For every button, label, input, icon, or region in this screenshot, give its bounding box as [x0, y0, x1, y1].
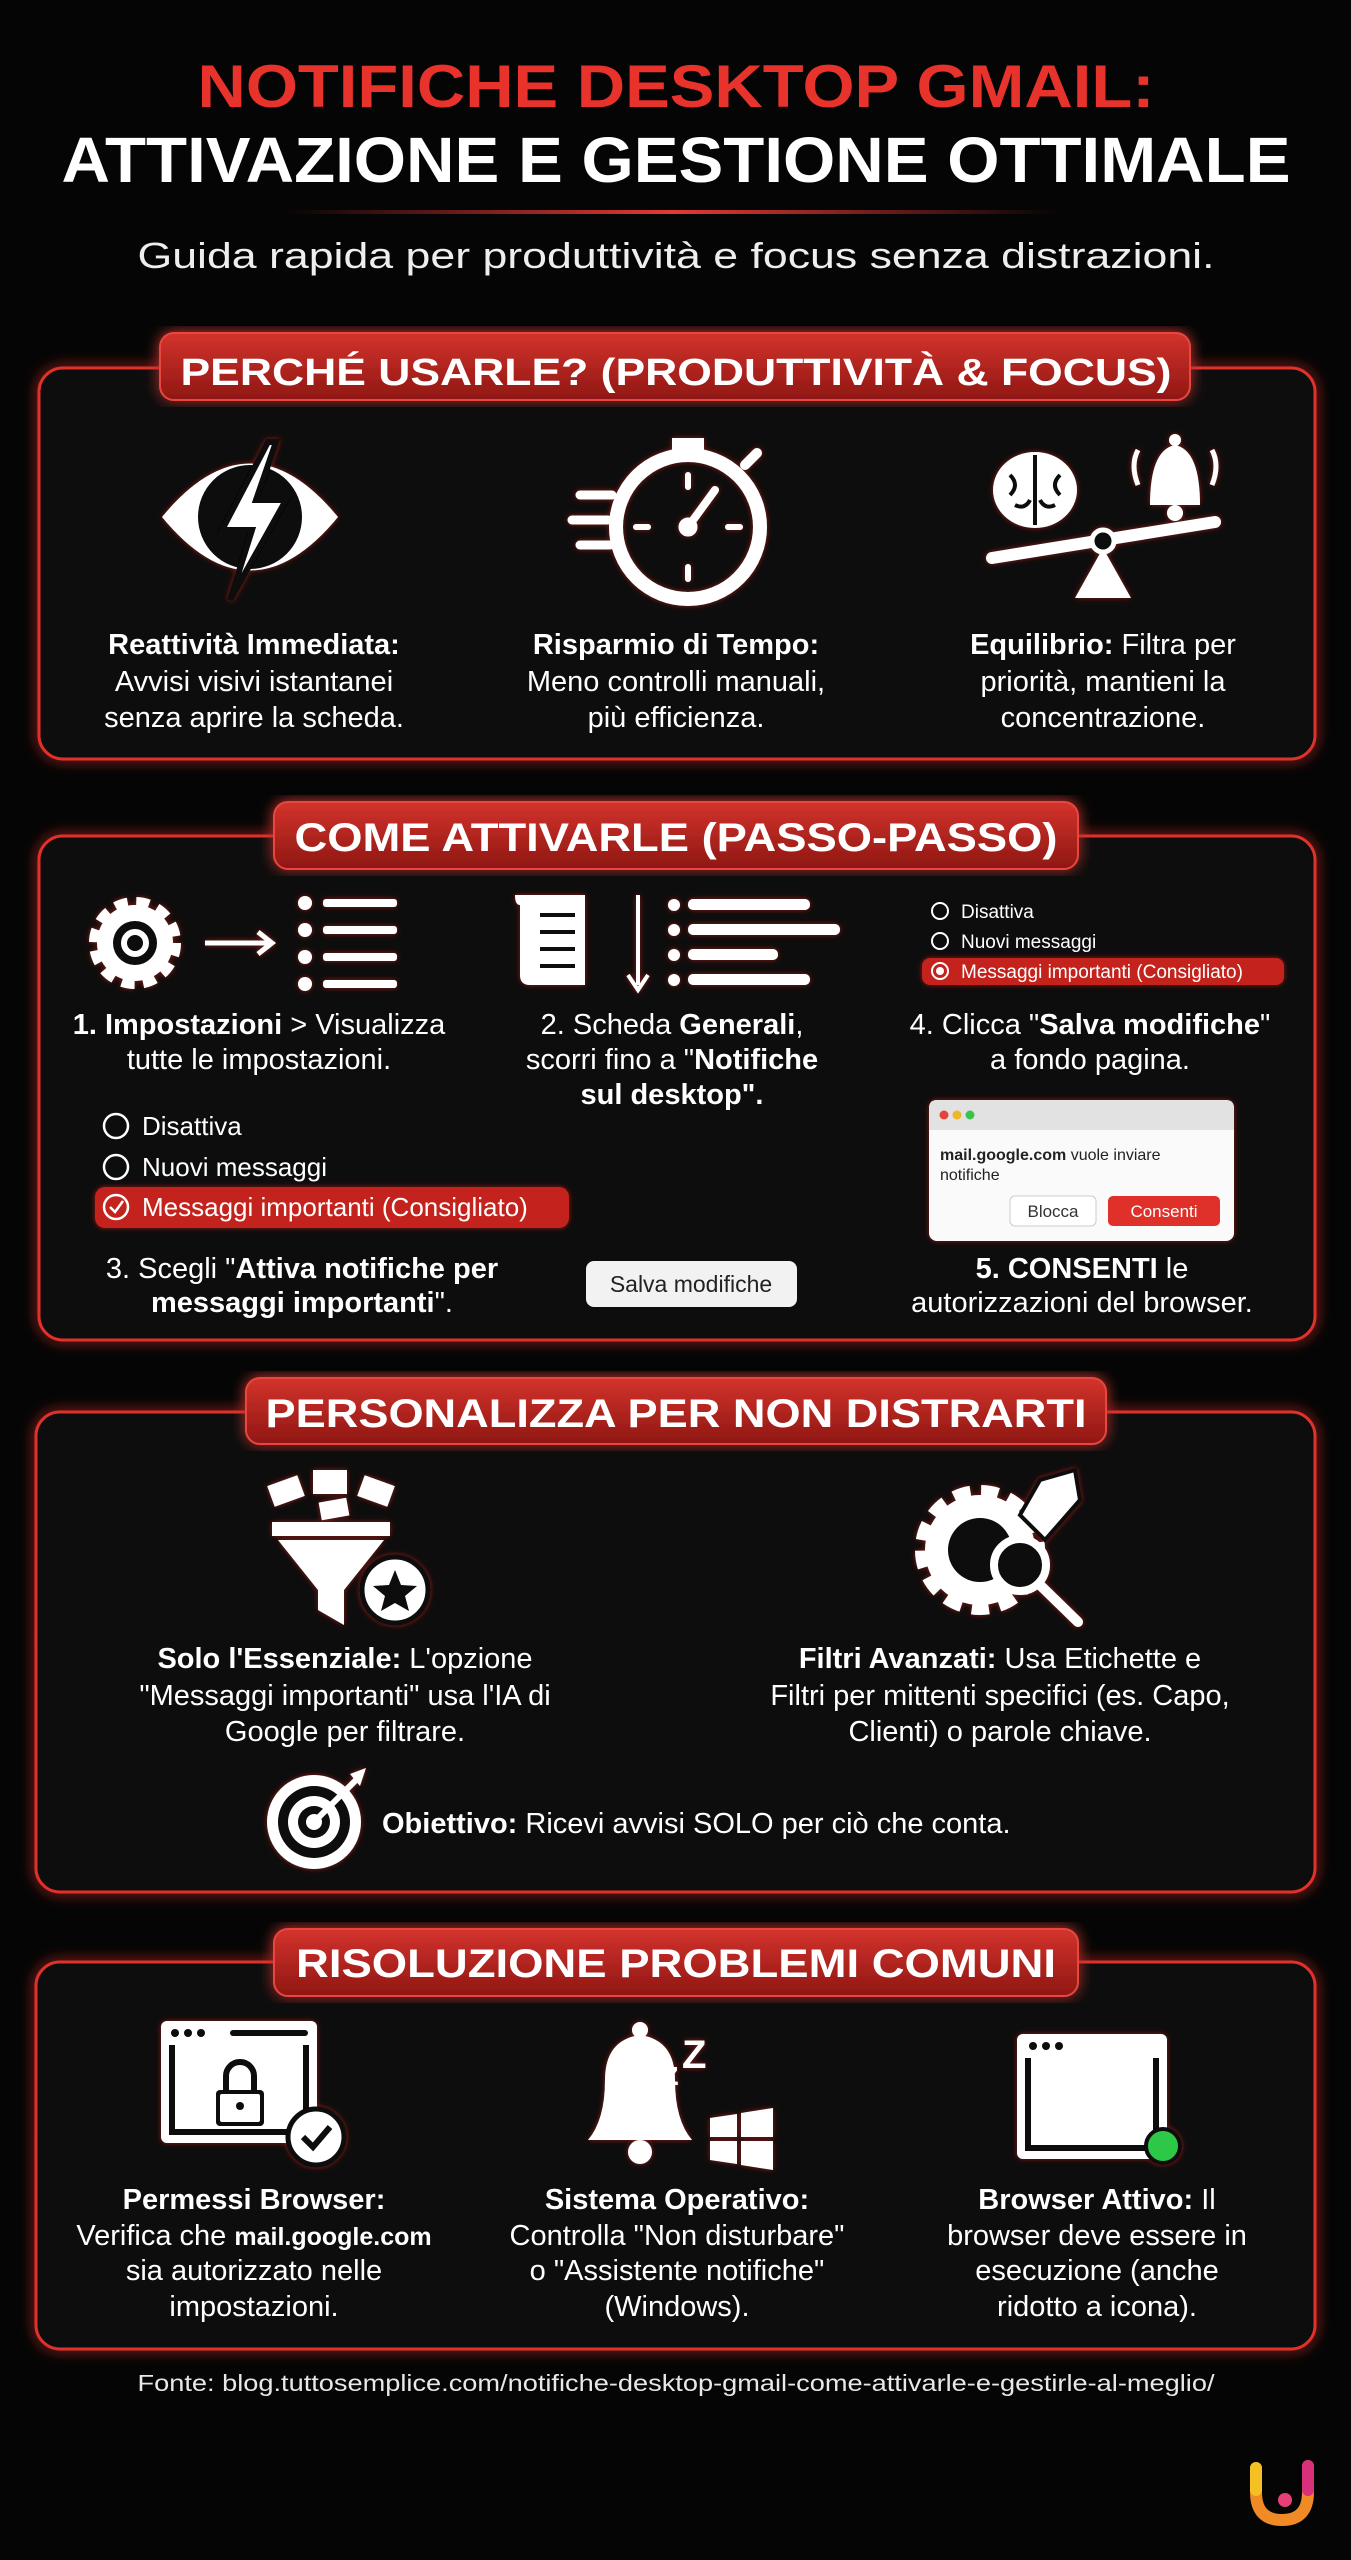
icon: funnel with envelopes and star — [267, 1470, 428, 1625]
text: equilibrio: concentrazione. — [1001, 702, 1205, 734]
subtitle: Guida rapida per produttività e focus senza distrazioni. — [138, 235, 1214, 276]
panel: personalizza — [36, 1378, 1315, 1892]
text: permessi browser — [76, 2184, 432, 2323]
text: browser attivo: browser deve essere in — [947, 2220, 1247, 2252]
text: sistema operativo: Sistema Operativo: — [545, 2184, 809, 2216]
step 3 radio options: Nuovi messaggi — [142, 1152, 327, 1182]
panel: risoluzione problemi — [36, 1929, 1315, 2349]
button: salva modifiche — [586, 1261, 797, 1307]
browser permission dialog: notifiche — [940, 1167, 1000, 1184]
text: reattività — [104, 629, 404, 734]
browser permission dialog: Blocca — [1027, 1202, 1079, 1221]
text: obiettivo: Obiettivo: Ricevi avvisi SOLO per ciò che conta. — [382, 1808, 1011, 1840]
step 4 radio options — [922, 902, 1284, 985]
logo — [1256, 2466, 1308, 2520]
text: filtri avanzati — [770, 1643, 1230, 1748]
text: solo l'essenziale: Google per filtrare. — [225, 1716, 465, 1748]
text: step 1 — [73, 1009, 446, 1076]
text: step 5: autorizzazioni del browser. — [911, 1287, 1253, 1319]
footer source: Fonte: blog.tuttosemplice.com/notifiche-desktop-gmail-come-attivarle-e-gestirle-al-meglio/ — [138, 2370, 1215, 2396]
icon: bell zzz windows: z — [662, 2055, 679, 2093]
header: risoluzione — [274, 1929, 1078, 1996]
text: step 5 — [911, 1253, 1253, 1319]
icon: bell zzz windows: Z — [682, 2033, 706, 2077]
text: solo l'essenziale — [139, 1643, 551, 1748]
text: step 4 — [910, 1009, 1270, 1076]
text: reattività: Reattività Immediata: — [108, 629, 400, 661]
icon: browser lock check — [161, 2021, 344, 2165]
step 4 radio options: Messaggi importanti (Consigliato) — [961, 962, 1243, 983]
text: risparmio: Meno controlli manuali, — [527, 666, 825, 698]
header: perché usarle — [160, 333, 1190, 400]
icon: eye with lightning — [162, 442, 338, 600]
text: solo l'essenziale: "Messaggi importanti" usa l'IA di — [139, 1680, 551, 1712]
button: salva modifiche: Salva modifiche — [610, 1271, 772, 1297]
text: sistema operativo: (Windows). — [604, 2291, 750, 2323]
header: personalizza — [246, 1378, 1106, 1444]
header: risoluzione: RISOLUZIONE PROBLEMI COMUNI — [296, 1942, 1056, 1986]
title — [62, 53, 1290, 196]
step 3 radio options: Disattiva — [142, 1111, 242, 1141]
text: step 1: tutte le impostazioni. — [127, 1044, 391, 1076]
text: sistema operativo: Controlla "Non disturbare" — [510, 2220, 844, 2252]
text: sistema operativo — [510, 2184, 844, 2323]
text: solo l'essenziale: Solo l'Essenziale: L'opzione — [157, 1643, 533, 1675]
text: browser attivo — [947, 2184, 1247, 2323]
text: step 2: scorri fino a "Notifiche — [526, 1044, 818, 1076]
header: perché usarle: PERCHÉ USARLE? (PRODUTTIVITÀ & FOCUS) — [180, 350, 1172, 394]
step 3 radio options: Messaggi importanti (Consigliato) — [142, 1192, 528, 1222]
browser permission dialog — [929, 1100, 1234, 1241]
text: reattività: Avvisi visivi istantanei — [115, 666, 393, 698]
icon: gear, tag and magnifier — [925, 1470, 1080, 1622]
header: come attivarle — [274, 802, 1078, 869]
browser permission dialog: mail.google.com vuole inviare — [940, 1147, 1161, 1164]
text: step 2: sul desktop". — [581, 1079, 763, 1111]
text: filtri avanzati: Clienti) o parole chiave. — [848, 1716, 1152, 1748]
text: step 4: 4. Clicca "Salva modifiche" — [910, 1009, 1270, 1041]
text: browser attivo: ridotto a icona). — [997, 2291, 1197, 2323]
icon: scroll down list — [515, 895, 840, 990]
text: browser attivo: Browser Attivo: Il — [978, 2184, 1216, 2216]
header: personalizza: PERSONALIZZA PER NON DISTRARTI — [266, 1392, 1086, 1436]
panel: perché usarle — [39, 333, 1315, 759]
text: step 2: 2. Scheda Generali, — [541, 1009, 803, 1041]
text: permessi browser: Verifica che mail.google.com — [76, 2220, 432, 2252]
text: risparmio: più efficienza. — [588, 702, 764, 734]
icon: brain, bell and balance — [992, 434, 1216, 598]
step 3 radio options — [95, 1111, 569, 1228]
text: permessi browser: impostazioni. — [169, 2291, 339, 2323]
header: come attivarle: COME ATTIVARLE (PASSO-PASSO) — [294, 816, 1058, 860]
text: equilibrio — [970, 629, 1236, 734]
text: step 2 — [526, 1009, 818, 1111]
text: browser attivo: esecuzione (anche — [975, 2255, 1219, 2287]
text: equilibrio: priorità, mantieni la — [980, 666, 1226, 698]
text: step 5: 5. CONSENTI le — [976, 1253, 1188, 1285]
text: step 3: messaggi importanti". — [151, 1287, 453, 1319]
text: filtri avanzati: Filtri Avanzati: Usa Etichette e — [799, 1643, 1201, 1675]
text: permessi browser: sia autorizzato nelle — [126, 2255, 382, 2287]
text: reattività: senza aprire la scheda. — [104, 702, 404, 734]
text: permessi browser: Permessi Browser: — [123, 2184, 385, 2216]
text: step 3: 3. Scegli "Attiva notifiche per — [106, 1253, 498, 1285]
step 4 radio options: Disattiva — [961, 902, 1034, 923]
text: risparmio — [527, 629, 825, 734]
title: NOTIFICHE DESKTOP GMAIL: — [198, 53, 1154, 120]
icon: browser with green dot — [1017, 2034, 1180, 2163]
icon: target — [267, 1768, 366, 1869]
panel: come attivarle — [39, 802, 1315, 1340]
text: risparmio: Risparmio di Tempo: — [533, 629, 819, 661]
text: sistema operativo: o "Assistente notifiche" — [530, 2255, 824, 2287]
text: equilibrio: Equilibrio: Filtra per — [970, 629, 1236, 661]
browser permission dialog: Consenti — [1130, 1202, 1198, 1221]
step 4 radio options: Nuovi messaggi — [961, 932, 1096, 953]
title: ATTIVAZIONE E GESTIONE OTTIMALE — [62, 124, 1290, 196]
icon: stopwatch — [572, 440, 760, 599]
text: step 3 — [106, 1253, 498, 1319]
text: filtri avanzati: Filtri per mittenti specifici (es. Capo, — [770, 1680, 1230, 1712]
text: step 4: a fondo pagina. — [990, 1044, 1190, 1076]
text: step 1: 1. Impostazioni > Visualizza — [73, 1009, 446, 1041]
icon: bell zzz windows — [588, 2022, 773, 2170]
icon: gear arrow list — [97, 896, 397, 991]
